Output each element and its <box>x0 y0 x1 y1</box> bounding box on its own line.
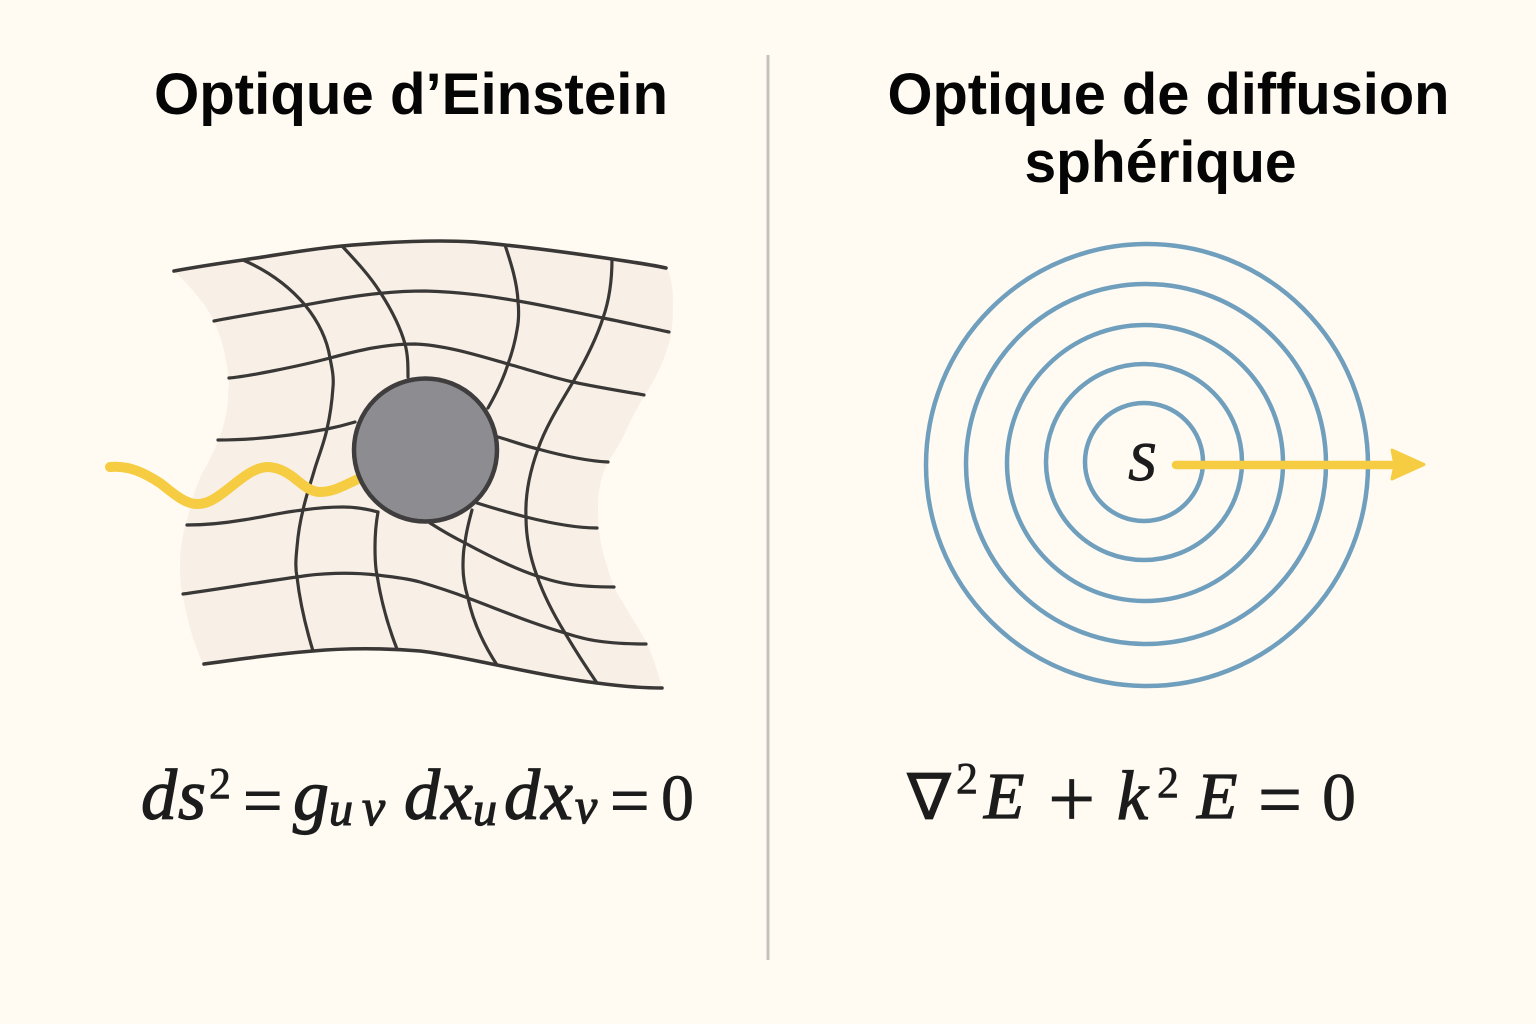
equation: Einstein optics: v <box>362 780 386 837</box>
equation: spherical scattering optics: ∇ <box>906 762 951 833</box>
equation: Einstein optics: g <box>293 755 329 835</box>
equation: spherical scattering optics: = <box>1258 756 1302 843</box>
equation: spherical scattering optics: 0 <box>1322 759 1356 835</box>
equation: spherical scattering optics: 2 <box>1157 758 1179 807</box>
source label: S <box>1128 432 1156 492</box>
equation: Einstein optics: 0 <box>661 762 694 835</box>
wavy yellow light ray <box>110 467 358 504</box>
equation: Einstein optics: u <box>329 783 353 836</box>
equation: Einstein optics: d <box>141 755 178 835</box>
heading: Optique de diffusion sphérique: sphérique <box>1024 130 1296 195</box>
vertical grid lines <box>243 245 612 683</box>
equation: Einstein optics: v <box>575 778 598 834</box>
equation: Einstein optics: x <box>440 755 473 835</box>
equation: Einstein optics: u <box>473 783 497 836</box>
concentric spherical wave illustration <box>926 244 1424 686</box>
horizontal grid lines <box>174 241 669 688</box>
heading: Optique de diffusion sphérique: Optique de diffusion <box>888 62 1450 127</box>
equation: Einstein optics: = <box>243 763 282 840</box>
massive body <box>354 378 497 522</box>
divider line <box>766 55 770 960</box>
equation: spherical scattering optics: + <box>1048 753 1095 846</box>
equation: Einstein optics: = <box>610 763 649 840</box>
equation: spherical scattering optics: k <box>1117 758 1150 835</box>
equation: Einstein optics: d <box>404 755 441 835</box>
heading: Optique d'Einstein: Optique d’Einstein <box>154 62 668 127</box>
equation: spherical scattering optics: E <box>983 760 1024 833</box>
equation: spherical scattering optics <box>906 753 1356 846</box>
heading: Optique de diffusion sphérique <box>888 62 1450 195</box>
wave rings <box>926 244 1368 686</box>
equation: Einstein optics: s <box>178 755 206 835</box>
yellow arrow <box>1176 450 1424 479</box>
equation: Einstein optics: d <box>504 755 541 835</box>
grid sheet <box>175 241 673 688</box>
equation: spherical scattering optics: 2 <box>956 754 978 803</box>
equation: spherical scattering optics: E <box>1196 760 1237 833</box>
equation: Einstein optics: 2 <box>209 759 231 808</box>
curved spacetime grid illustration <box>110 241 673 688</box>
equation: Einstein optics <box>141 755 694 840</box>
equation: Einstein optics: x <box>540 755 573 835</box>
